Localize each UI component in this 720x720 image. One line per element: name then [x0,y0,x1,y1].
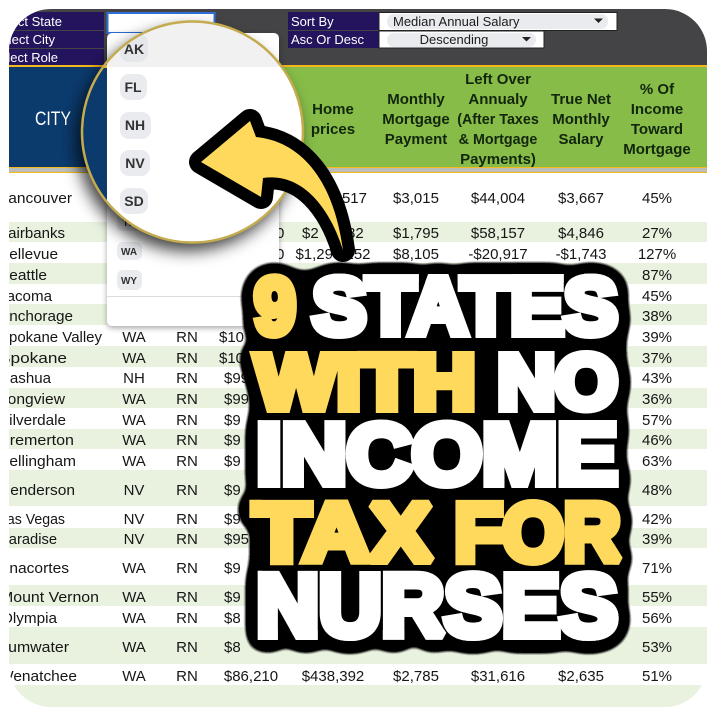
table rows: RN [176,482,198,499]
table rows: Paradise [0,531,57,548]
table rows: 127% [638,246,676,263]
table rows: Spokane [0,350,67,367]
headline line 1: 9 [254,262,296,350]
table rows: 46% [642,432,672,449]
table rows: RN [176,511,198,528]
table rows: Bellevue [0,246,58,263]
table header: Mortgage [623,141,691,158]
table rows: $9 [224,412,241,429]
table rows: 39% [642,531,672,548]
headline line 4: FOR [454,488,620,578]
table rows: WA [122,560,146,577]
table rows: $1,795 [393,225,439,242]
table rows: RN [176,412,198,429]
table rows: WA [122,610,146,627]
table rows: $99 [224,370,249,387]
table header: & Mortgage [459,132,537,148]
state select input [108,13,214,33]
table rows: $2,785 [393,668,439,685]
table rows: 37% [642,350,672,367]
sort by control [288,12,617,30]
table rows: WA [122,350,146,367]
headline line 4: TAX [254,488,432,578]
table rows: $10 [219,329,244,346]
table rows: $58,157 [471,225,525,242]
table rows: 48% [642,482,672,499]
table rows: 45% [642,190,672,207]
headline line 5: NURSES [256,558,618,654]
table rows: Anacortes [0,560,69,577]
table rows: WA [122,391,146,408]
table header: Monthly [552,111,610,128]
table header: Home [312,101,354,118]
table rows: Silverdale [0,412,66,429]
table rows: 43% [642,370,672,387]
sort order control: Asc Or Desc [291,32,364,47]
table rows: WA [122,412,146,429]
table rows: Longview [0,391,65,408]
table rows: RN [176,329,198,346]
table rows: NV [124,511,144,528]
table rows: Bremerton [0,432,74,449]
table header: Salary [558,131,604,148]
table rows: Anchorage [0,308,73,325]
table rows: $2,635 [558,668,604,685]
table rows: $8 [224,639,241,656]
top control bar [0,9,707,65]
table rows: $10 [219,350,244,367]
table rows: 53% [642,639,672,656]
table rows: 82 [347,225,364,242]
table rows: RN [176,589,198,606]
table rows: RN [176,610,198,627]
table rows: $1,298,152 [295,246,371,263]
table rows: 36% [642,391,672,408]
magnifier lens: SD [124,193,144,209]
magnifier lens [80,20,310,245]
table header: Income [631,101,683,118]
headline line 4 [254,488,620,578]
icon: curved arrow pointing to state list [201,121,343,250]
headline line 3: INCOME [256,408,618,502]
table rows: RN [176,531,198,548]
table header: prices [311,121,355,138]
table rows: $9 [224,511,241,528]
table rows: RN [176,453,198,470]
table rows: RN [176,391,198,408]
sort order control: Descending [420,32,488,47]
magnifier lens: NV [125,155,145,171]
state dropdown panel [107,33,279,326]
table header: Left Over [465,71,531,88]
magnifier lens: FL [124,79,142,95]
state dropdown panel: WY [121,276,137,287]
table rows: RN [176,370,198,387]
table rows: Tacoma [0,288,53,305]
table rows: RN [176,350,198,367]
table rows: Vancouver [0,190,72,207]
table header: CITY [35,109,71,130]
table rows: NH [123,370,145,387]
headline line 2 [256,340,618,426]
table rows: 71% [642,560,672,577]
table rows: RN [176,668,198,685]
sort by control: Sort By [291,14,334,29]
table rows: 55% [642,589,672,606]
table rows: Tumwater [0,639,69,656]
table rows: 63% [642,453,672,470]
table rows: $99 [224,391,249,408]
table rows: $9 [224,432,241,449]
table header: Toward [631,121,683,138]
table rows: WA [122,668,146,685]
table rows: Wenatchee [0,668,77,685]
table rows: NV [124,531,144,548]
table rows: Fairbanks [0,225,65,242]
magnifier lens: NH [125,117,145,133]
table rows: WA [122,432,146,449]
sort order control [288,31,544,48]
table rows: -$1,743 [556,246,606,263]
table rows: $9 [224,482,241,499]
table rows: 42% [642,511,672,528]
table header: True Net [551,91,611,108]
table header: Payments) [460,151,536,168]
table rows: $4,846 [558,225,604,242]
table header: Mortgage [382,111,450,128]
table rows: Seattle [0,267,47,284]
table rows: WA [122,329,146,346]
table rows: 56% [642,610,672,627]
sort by control: Median Annual Salary [393,14,520,29]
table rows: $44,004 [471,190,525,207]
table rows: Las Vegas [0,511,65,528]
table header: Payment [385,131,447,148]
table rows: 0 [276,246,284,263]
table rows: Bellingham [0,453,76,470]
headline line 2: WITH [256,340,476,426]
table rows: $86,210 [224,668,278,685]
table rows: 45% [642,288,672,305]
table rows: WA [122,589,146,606]
table rows: 87% [642,267,672,284]
table rows: $8,105 [393,246,439,263]
table rows: $8 [224,610,241,627]
table rows: Olympia [1,610,58,627]
table rows: -$20,917 [468,246,528,263]
table rows: 27% [642,225,672,242]
headline line 2: NO [498,340,618,426]
table header: % Of [640,81,675,98]
table rows: 39% [642,329,672,346]
table rows: WA [122,453,146,470]
headline line 1: STATES [312,262,618,350]
table rows: Henderson [0,482,75,499]
table rows [0,190,707,707]
table rows: 57% [642,412,672,429]
table rows: Nashua [0,370,52,387]
table header: Annualy [468,91,528,108]
table header [9,65,707,173]
table rows: $31,616 [471,668,525,685]
filter labels [0,12,104,65]
table rows: RN [176,560,198,577]
table rows: $3,667 [558,190,604,207]
table rows: 38% [642,308,672,325]
table rows: $438,392 [302,668,364,685]
table rows: $9 [224,560,241,577]
table rows: 51% [642,668,672,685]
table rows: Mount Vernon [0,589,99,606]
table rows: $95, [224,531,253,548]
table rows: RN [176,639,198,656]
magnifier lens: AK [124,41,144,57]
table rows: NV [124,482,144,499]
table rows: RN [176,432,198,449]
table rows: $9 [224,453,241,470]
state dropdown panel: TX [123,218,136,229]
headline [254,262,620,654]
table rows: 0 [276,225,284,242]
table rows: WA [122,639,146,656]
table header: (After Taxes [457,112,539,128]
table rows: $3,015 [393,190,439,207]
table rows: 517 [342,190,367,207]
table rows: $9 [224,589,241,606]
table rows: $2 [302,225,319,242]
table rows: Spokane Valley [0,329,102,346]
state dropdown panel: WA [121,247,137,258]
table header: Monthly [387,91,445,108]
